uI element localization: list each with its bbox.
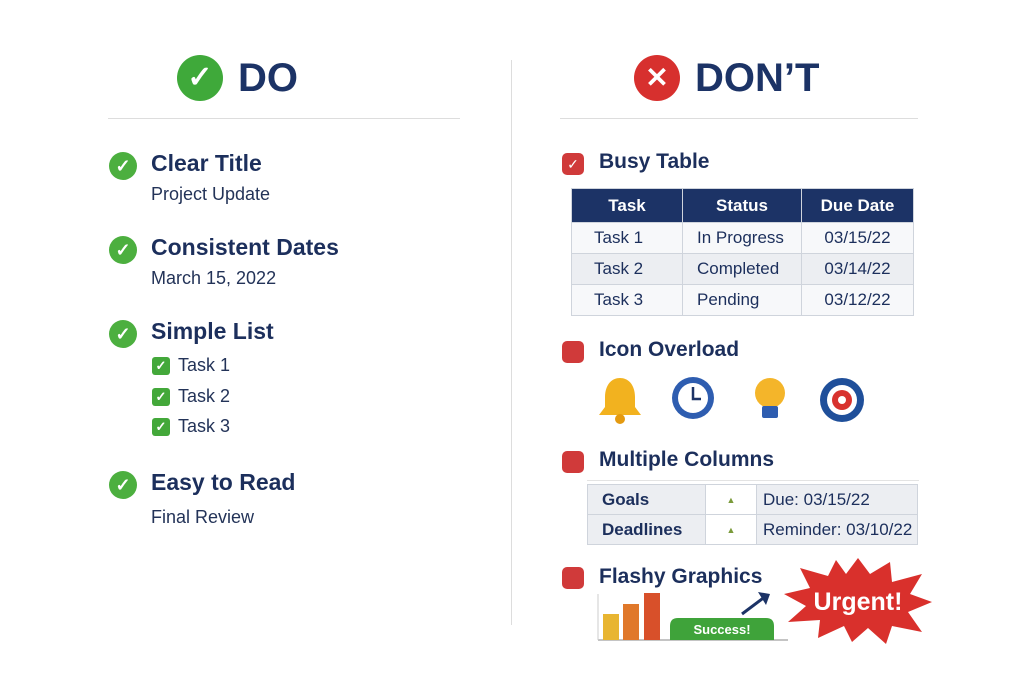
- icons: [599, 377, 864, 424]
- icon: big check: [177, 55, 223, 101]
- item: Simple List: Simple List: [151, 318, 274, 344]
- item: Simple List: ✓: [156, 419, 166, 434]
- item: Easy to Read: [109, 469, 295, 527]
- section: Icon Overload: [562, 338, 864, 424]
- section: Busy Table: Busy Table: [599, 150, 709, 173]
- item: Clear Title: [109, 150, 270, 204]
- item: Clear Title: Clear Title: [151, 150, 262, 176]
- table: Pending: [697, 290, 759, 309]
- item: Clear Title: Project Update: [151, 184, 270, 204]
- item: Consistent Dates: [109, 234, 339, 288]
- icon: big X: [634, 55, 680, 101]
- starburst: Urgent: [784, 558, 932, 644]
- table: Completed: [697, 259, 779, 278]
- columns table: Deadlines: [602, 520, 682, 538]
- table: Task: [608, 196, 646, 214]
- item: Consistent Dates: March 15, 2022: [151, 268, 276, 288]
- section: Multiple Columns: [562, 448, 919, 545]
- table: Task 1: [594, 228, 643, 247]
- section: Icon Overload: Icon Overload: [599, 338, 739, 361]
- item: Simple List: Task 3: [178, 416, 230, 436]
- chart: [598, 592, 788, 640]
- columns table: [587, 484, 918, 545]
- columns table: Due: 03/15/22: [763, 490, 870, 508]
- table: Task 3: [594, 290, 643, 309]
- table: 03/14/22: [824, 259, 891, 278]
- section: Busy Table: ✓: [567, 156, 579, 172]
- item: Simple List: ✓: [156, 389, 166, 404]
- section: Flashy Graphics: Flashy Graphics: [599, 565, 762, 588]
- item: Easy to Read: Easy to Read: [151, 469, 295, 495]
- heading: DO: [177, 55, 298, 101]
- table: In Progress: [697, 228, 784, 247]
- item: Clear Title: ✓: [115, 156, 131, 176]
- table: Due Date: [821, 196, 894, 214]
- starburst: Urgent: Urgent!: [814, 588, 902, 616]
- columns table: Goals: [602, 490, 649, 508]
- table: Task 2: [594, 259, 643, 278]
- item: Simple List: Task 1: [178, 355, 230, 375]
- item: Consistent Dates: Consistent Dates: [151, 234, 339, 260]
- item: Easy to Read: Final Review: [151, 507, 254, 527]
- section: Flashy Graphics: [562, 558, 932, 644]
- table: 03/15/22: [824, 228, 891, 247]
- table: Status: [716, 196, 768, 214]
- columns table: ▲: [727, 494, 735, 504]
- section: Busy Table: [562, 150, 914, 316]
- heading: DON'T: DON’T: [695, 56, 819, 100]
- table: 03/12/22: [824, 290, 891, 309]
- heading: DO: DO: [238, 56, 298, 100]
- item: Simple List: Task 2: [178, 386, 230, 406]
- section: Multiple Columns: Multiple Columns: [599, 448, 774, 471]
- item: Simple List: ✓: [115, 324, 131, 344]
- heading: DON'T: [634, 55, 819, 101]
- item: Simple List: ✓: [156, 358, 166, 373]
- table: [571, 188, 914, 316]
- item: Easy to Read: ✓: [115, 475, 131, 495]
- columns table: ▲: [727, 524, 735, 534]
- icon: big X: ✕: [645, 62, 669, 93]
- item: Consistent Dates: ✓: [115, 240, 131, 260]
- columns table: Reminder: 03/10/22: [763, 520, 912, 538]
- chart: Success!: [693, 622, 751, 637]
- icon: big check: ✓: [187, 61, 213, 94]
- item: Simple List: [109, 318, 274, 436]
- divider lines: [108, 118, 460, 119]
